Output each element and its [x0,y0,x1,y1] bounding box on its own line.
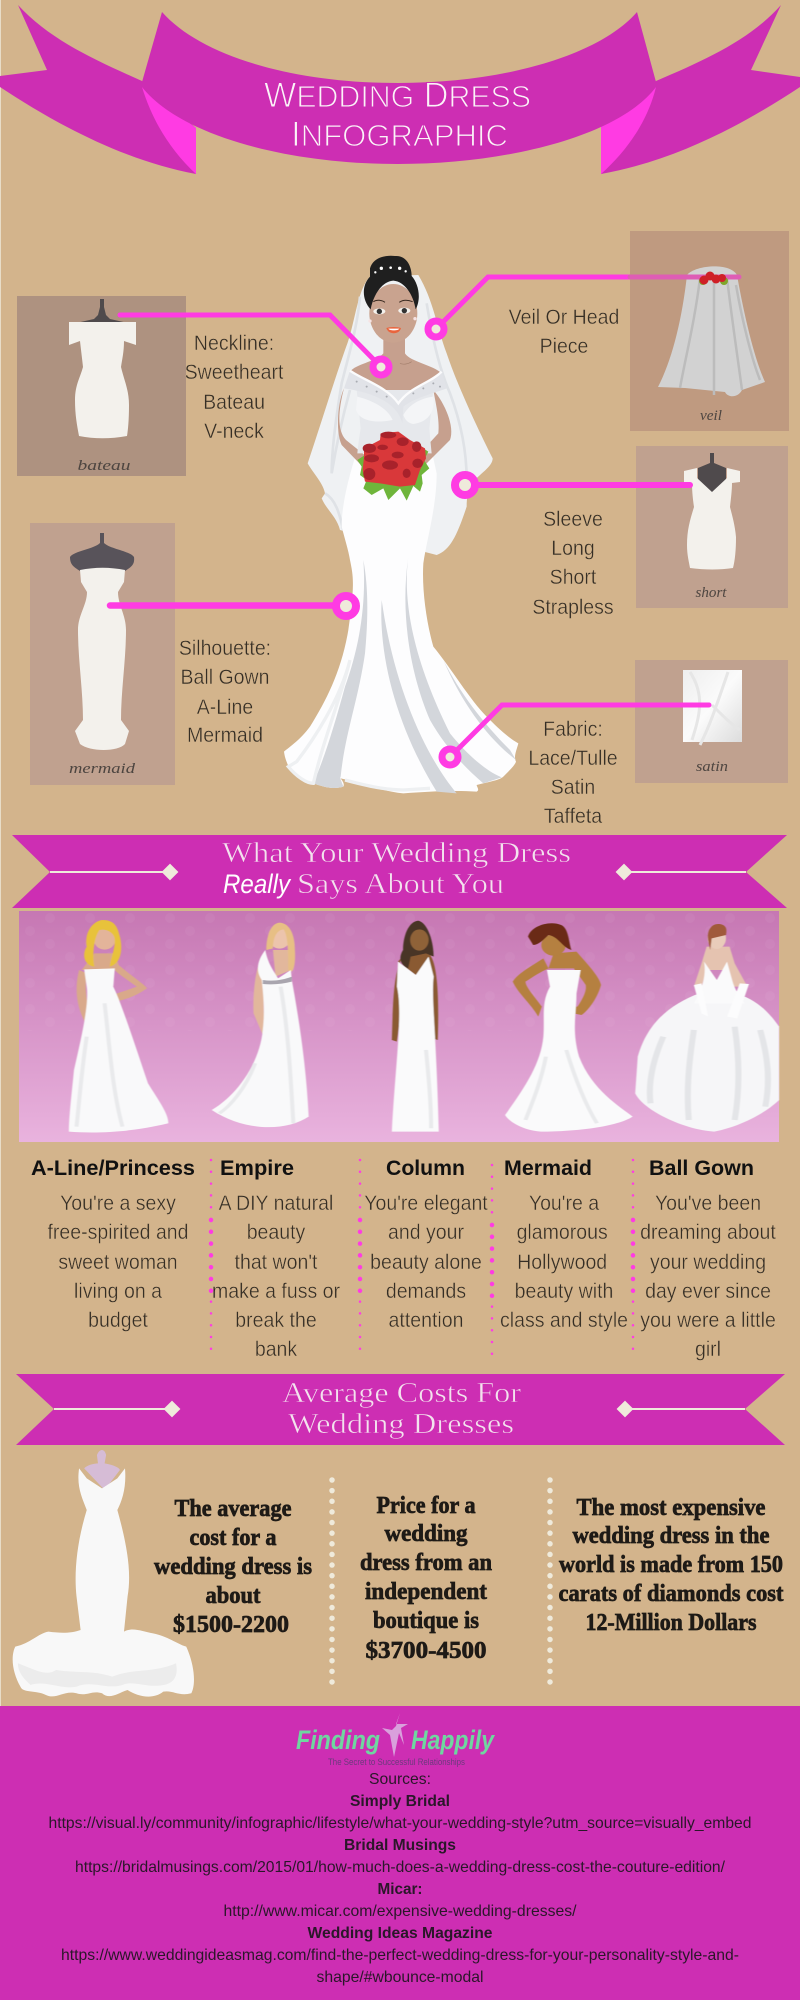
text: average cost: about [206,1583,261,1609]
text: fabric: Satin [551,776,595,799]
hair [364,256,419,309]
collar beads [356,381,441,398]
text: average cost: The average [174,1496,292,1522]
text: neckline: V-neck [204,420,265,443]
heading: Column [386,1156,465,1180]
description: Hollywood [517,1251,607,1274]
figure: a-line princess [69,920,168,1132]
sources list: http://www.micar.com/expensive-wedding-dresses/ [224,1903,577,1920]
skirt edge tints [288,660,430,790]
text: neckline: Neckline: [194,332,274,355]
label: satin [696,759,728,775]
description: attention [389,1309,463,1332]
teeth [388,329,399,330]
collar highlight [350,371,442,403]
sources list: https://bridalmusings.com/2015/01/how-much-does-a-wedding-dress-cost-the-couture-edition/ [75,1859,726,1876]
text: sleeve: Strapless [532,596,614,619]
veil folds [680,276,760,395]
label: veil [700,408,722,424]
title text: INFOGRAPHIC [291,115,508,154]
text: boutique price: $3700-4500 [366,1638,486,1664]
text: veil or head piece: Veil Or Head [509,306,619,329]
banner left tail [0,5,196,174]
description: make a fuss or [212,1280,340,1303]
label: short [696,585,727,601]
lips [386,327,401,333]
satin folds [690,672,740,745]
left rule and diamond [50,865,177,879]
panel: mermaid dress [30,523,175,785]
description: dreaming about [640,1221,776,1244]
description: demands [386,1280,466,1303]
panel: bateau dress [17,296,186,476]
logo tagline: The Secret to Successful Relationships [328,1757,465,1767]
bouquet leaves [357,448,429,501]
sources list: Bridal Musings [344,1837,456,1854]
description: sweet woman [58,1251,178,1274]
text: boutique price [360,1493,492,1664]
mermaid dress shape [75,568,129,750]
text: silhouette: A-Line [197,696,253,719]
text: neckline: Sweetheart [185,361,284,384]
skirt folds [313,557,516,793]
sources list: https://visual.ly/community/infographic/lifestyle/what-your-wedding-style?utm_source=visually_embed [48,1815,752,1832]
text: silhouette: Silhouette: [179,637,271,660]
column: empire [212,1156,340,1361]
veil shape [658,266,765,396]
text: most expensive: world is made from 150 [559,1552,783,1578]
figure: empire [212,923,309,1127]
veil [308,275,493,555]
right rule and diamond [617,865,746,879]
ruffle shading [18,1663,177,1687]
logo [296,1713,496,1767]
figure: mermaid [505,923,633,1132]
description: class and style [500,1309,628,1332]
bodice [357,390,433,453]
description: You've been [655,1192,761,1215]
description: and your [388,1221,464,1244]
description: girl [695,1338,721,1361]
text: average cost: cost for a [190,1525,276,1551]
title text: WEDDING DRESS [264,76,531,115]
bouquet roses [363,432,426,487]
sources list [48,1771,752,1986]
description: beauty [247,1221,306,1244]
text: neckline: Bateau [203,391,265,414]
panel: short dress [636,446,788,608]
bodice cups [356,397,434,424]
icon: ruffled white dress [13,1450,194,1697]
column: mermaid [500,1156,628,1332]
column: ball gown [640,1156,776,1361]
text: boutique price: independent [365,1579,487,1605]
description: day ever since [645,1280,771,1303]
callout line: silhouette [110,596,356,616]
banner right fold [601,87,656,174]
left arm [338,388,367,464]
label: mermaid [69,761,136,777]
logo word right: Happily [411,1725,496,1755]
left edge line [0,0,1,1706]
text: average cost: wedding dress is [154,1554,312,1580]
heading: Ball Gown [649,1156,754,1180]
description: your wedding [650,1251,766,1274]
text: fabric: Taffeta [544,805,603,828]
heading line 2 rest: Says About You [297,868,504,900]
eyes [373,300,413,314]
dotted dividers: costs [332,1480,550,1683]
text: boutique price: boutique is [373,1608,479,1634]
panel: five dress styles [19,911,779,1142]
skirt [284,440,518,793]
banner left fold [142,87,196,174]
tiara pearls [374,266,407,273]
sources list: https://www.weddingideasmag.com/find-the-perfect-wedding-dress-for-your-personality-style-and- [61,1947,739,1964]
right rule and diamond [618,1402,745,1416]
text: average cost: $1500-2200 [173,1612,289,1638]
satin swatch [683,670,742,742]
text: fabric: Lace/Tulle [528,747,618,770]
heading line 1: Average Costs For [282,1377,521,1409]
banner centre ribbon [142,12,656,164]
description: A DIY natural [219,1192,333,1215]
bride illustration [284,256,518,793]
bateau dress shape [69,322,136,438]
text: silhouette: Ball Gown [181,666,269,689]
heading: Mermaid [504,1156,592,1180]
text: most expensive: 12-Million Dollars [586,1610,756,1636]
sources list: Micar: [378,1881,422,1898]
title banner [0,5,800,174]
veil flowers [699,272,728,285]
footer panel [0,1706,800,2000]
text: boutique price: wedding [384,1521,468,1547]
description: beauty alone [370,1251,482,1274]
description: break the [235,1309,317,1332]
text: most expensive: carats of diamonds cost [558,1581,784,1607]
column: column [364,1156,488,1332]
text: most expensive: The most expensive [576,1495,766,1521]
section banner: average costs [16,1374,785,1445]
heading line 2: Wedding Dresses [288,1408,514,1440]
panel: veil [630,231,789,431]
veil shading [325,297,467,530]
description: that won't [235,1251,318,1274]
panel: satin fabric [635,660,788,783]
logo dancers [382,1713,408,1757]
callout line: sleeve [455,475,690,495]
callout line: neckline [120,315,389,375]
text: most expensive [558,1495,784,1636]
mannequin [698,453,726,492]
heading: Empire [220,1156,294,1180]
label: bateau [78,458,130,474]
heading line 2: Really [223,869,291,899]
mannequin [70,533,134,571]
text: boutique price: Price for a [376,1493,476,1519]
sources list: Wedding Ideas Magazine [308,1925,493,1942]
neck and shoulders [350,337,442,403]
column: a-line princess [31,1156,195,1332]
collarbone [400,362,412,364]
description: free-spirited and [47,1221,189,1244]
text: most expensive: wedding dress in the [572,1523,770,1549]
sources list: shape/#wbounce-modal [316,1969,484,1986]
collar [344,371,447,423]
left rule and diamond [54,1402,179,1416]
description: you were a little [640,1309,776,1332]
short dress shape [684,468,740,570]
description: You're elegant [364,1192,488,1215]
earrings [368,317,417,323]
banner right tail [601,5,800,174]
mannequin [76,299,128,323]
text: veil or head piece: Piece [540,335,588,358]
text: boutique price: dress from an [360,1550,492,1576]
heading line 1: What Your Wedding Dress [222,837,571,869]
description: glamorous [517,1221,608,1244]
text: sleeve: Short [550,566,597,589]
text: sleeve: Sleeve [543,508,603,531]
callout line: fabric [442,705,709,765]
description: living on a [74,1280,163,1303]
callout line: veil [428,277,739,337]
description: beauty with [515,1280,613,1303]
text: silhouette: Mermaid [187,724,263,747]
logo word left: Finding [296,1725,380,1755]
figure: column [392,921,439,1132]
text: sleeve: Long [551,537,595,560]
text: average cost [154,1496,312,1638]
description: budget [88,1309,148,1332]
text: fabric: Fabric: [543,718,603,741]
heading: A-Line/Princess [31,1156,195,1180]
description: You're a [529,1192,600,1215]
sources list: Simply Bridal [350,1793,450,1810]
face [369,284,417,343]
dress [13,1468,194,1697]
section banner: what your wedding dress really says about you [12,835,787,908]
sources list: Sources: [369,1771,431,1788]
title text [264,76,531,154]
mannequin [84,1450,120,1490]
description: bank [255,1338,298,1361]
right arm [420,390,451,465]
dotted dividers: columns [211,1160,633,1360]
description: You're a sexy [60,1192,177,1215]
figure: ball gown [635,924,779,1132]
